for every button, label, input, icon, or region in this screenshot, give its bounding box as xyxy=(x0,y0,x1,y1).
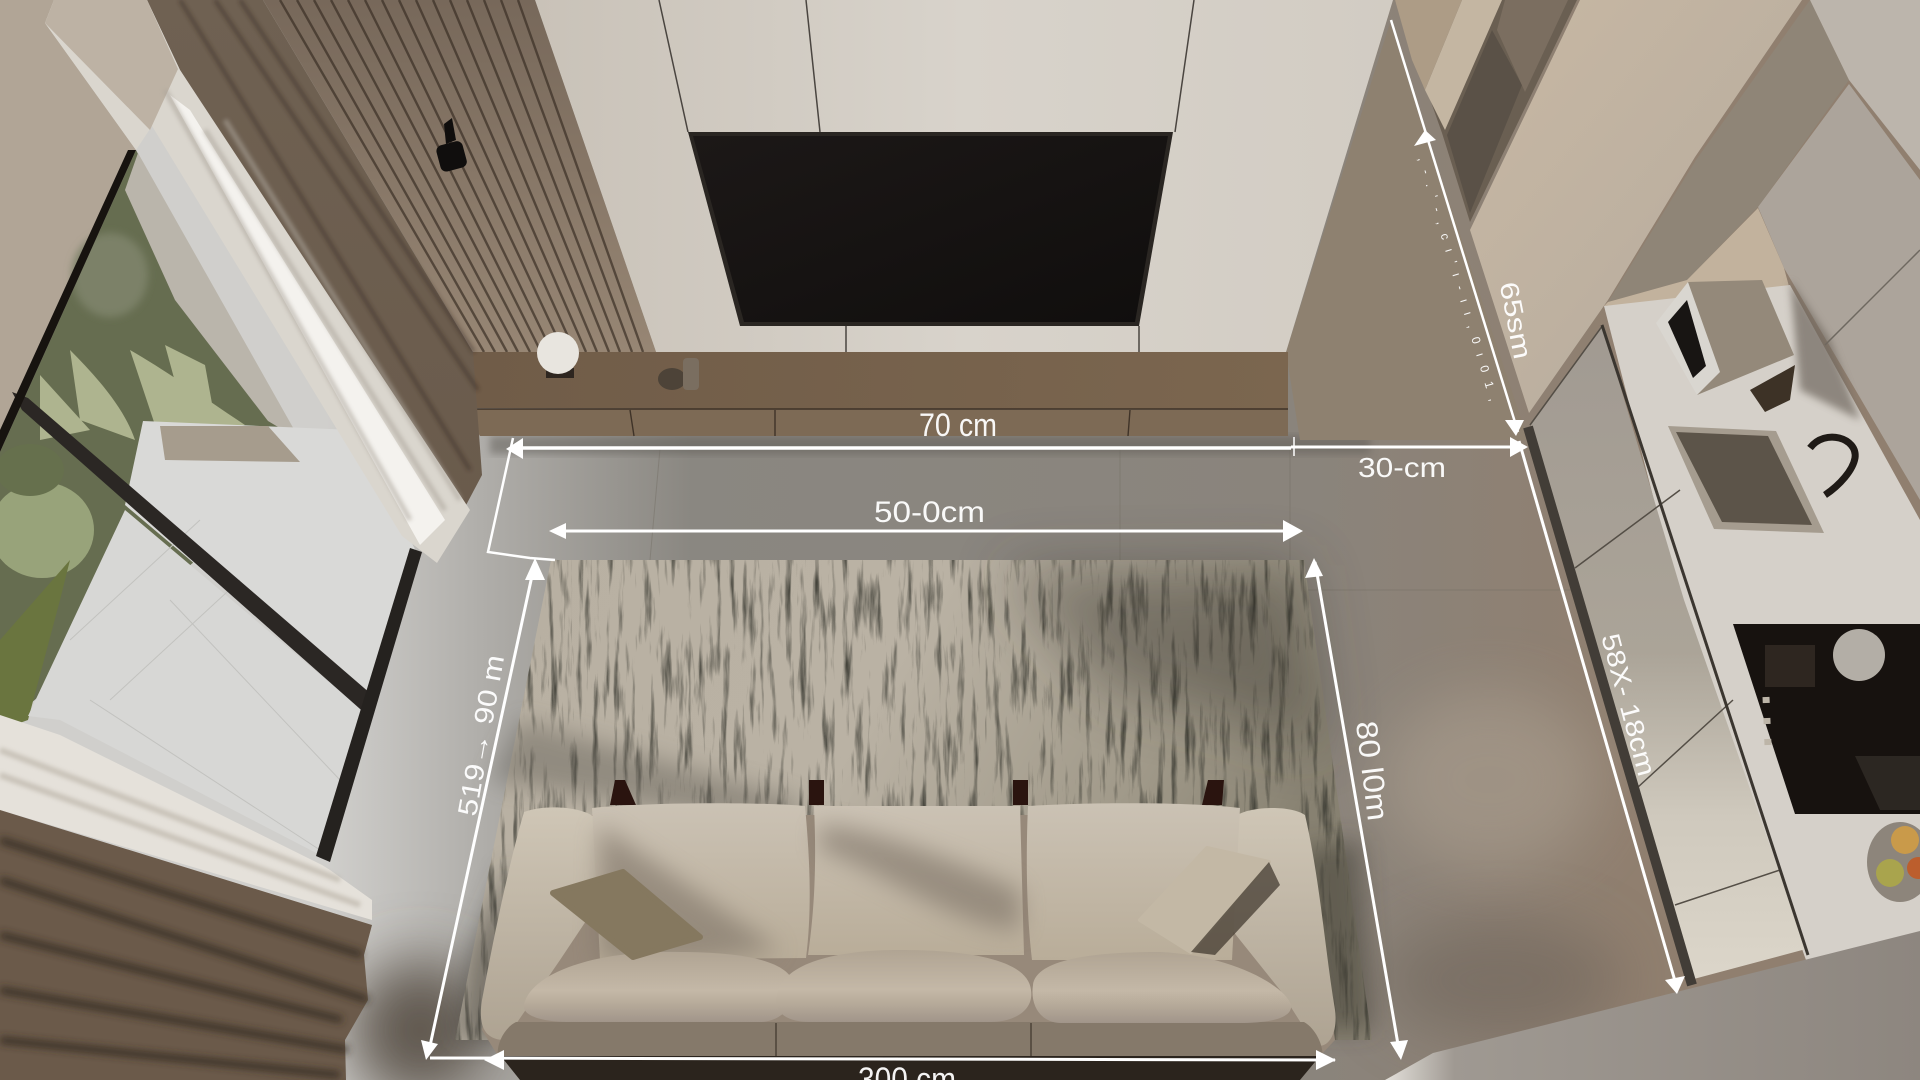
base cabinet fronts xyxy=(1530,325,1808,980)
sofa legs xyxy=(610,780,1224,805)
sofa xyxy=(481,803,1336,1080)
window frame xyxy=(0,150,422,862)
sink xyxy=(1668,426,1824,533)
terrace tiles xyxy=(28,421,416,856)
corner brown drapes xyxy=(0,810,372,1080)
wall light xyxy=(435,118,468,173)
left arm xyxy=(481,807,600,1040)
dimension: kitchen long side xyxy=(1519,441,1685,994)
foreground wall xyxy=(1385,931,1920,1080)
dimension: kitchen long side: 58X- 18cm xyxy=(1595,630,1662,779)
dimension: 50-0 cm xyxy=(549,496,1303,542)
wooden slat wall xyxy=(263,0,656,352)
diagonal light shadows xyxy=(598,825,1020,962)
pillow right xyxy=(1140,848,1280,955)
upper cabinets xyxy=(1758,84,1920,500)
pillow left xyxy=(553,872,700,957)
tall cabinetry and oven xyxy=(1395,0,1577,222)
back cushion right xyxy=(1027,803,1240,960)
marble countertop xyxy=(1604,280,1920,960)
dimension: 70 cm xyxy=(506,407,1291,459)
cream tall unit xyxy=(1470,0,1802,413)
right arm xyxy=(1232,808,1336,1046)
seat cushion right xyxy=(1032,952,1291,1023)
seat cushion middle xyxy=(776,950,1031,1022)
dimension: rug right side xyxy=(1305,558,1408,1060)
corner sheer curtain lower xyxy=(0,715,372,920)
cooktop xyxy=(1733,624,1920,814)
dimension: hallway side xyxy=(1391,20,1538,436)
dimension: 300 cm xyxy=(430,1050,1336,1080)
sofa base shadow xyxy=(496,1050,1325,1080)
white sheer curtain upper xyxy=(45,0,470,563)
back cushion left xyxy=(592,803,810,960)
corner bracket xyxy=(488,438,555,560)
back cushion middle xyxy=(808,806,1024,955)
faucet xyxy=(1810,437,1855,495)
dimension: 30 cm xyxy=(1291,437,1528,483)
utensil jar xyxy=(1750,365,1795,412)
rug xyxy=(455,560,1372,1040)
dimension: rug right side: 80 l0m xyxy=(1349,719,1394,822)
dimension: hallway side: 65sm xyxy=(1494,279,1538,361)
back wall with panels xyxy=(535,0,1393,352)
dimension: 50-0 cm: 50-0cm xyxy=(874,496,985,529)
soffit xyxy=(1608,0,1849,302)
dimension: rug left side xyxy=(421,558,545,1060)
globe lamp xyxy=(537,332,579,378)
base xyxy=(498,1022,1322,1056)
sofa silhouette backing xyxy=(482,815,1335,1056)
TV screen xyxy=(688,132,1173,326)
dimension: 30 cm: 30-cm xyxy=(1358,452,1446,483)
wood console xyxy=(462,352,1288,436)
floor edge plinth xyxy=(1528,427,1692,985)
brown curtain upper xyxy=(147,0,482,509)
garden view xyxy=(0,150,300,730)
microwave xyxy=(1656,280,1794,395)
small garbled dimension text: , - . ' - , c ı ' ı - ı ı , 0 ı 0 1 , xyxy=(1415,155,1501,403)
left wall xyxy=(0,0,136,452)
fruit bowl xyxy=(1867,822,1920,902)
dimension: rug left side: 519→ 90 m xyxy=(452,653,510,818)
seat cushion left xyxy=(524,952,795,1022)
console ornaments xyxy=(658,358,699,390)
dimension: 70 cm: 70 cm xyxy=(919,407,997,443)
recess xyxy=(1604,208,1790,306)
far wall xyxy=(1810,0,1920,170)
